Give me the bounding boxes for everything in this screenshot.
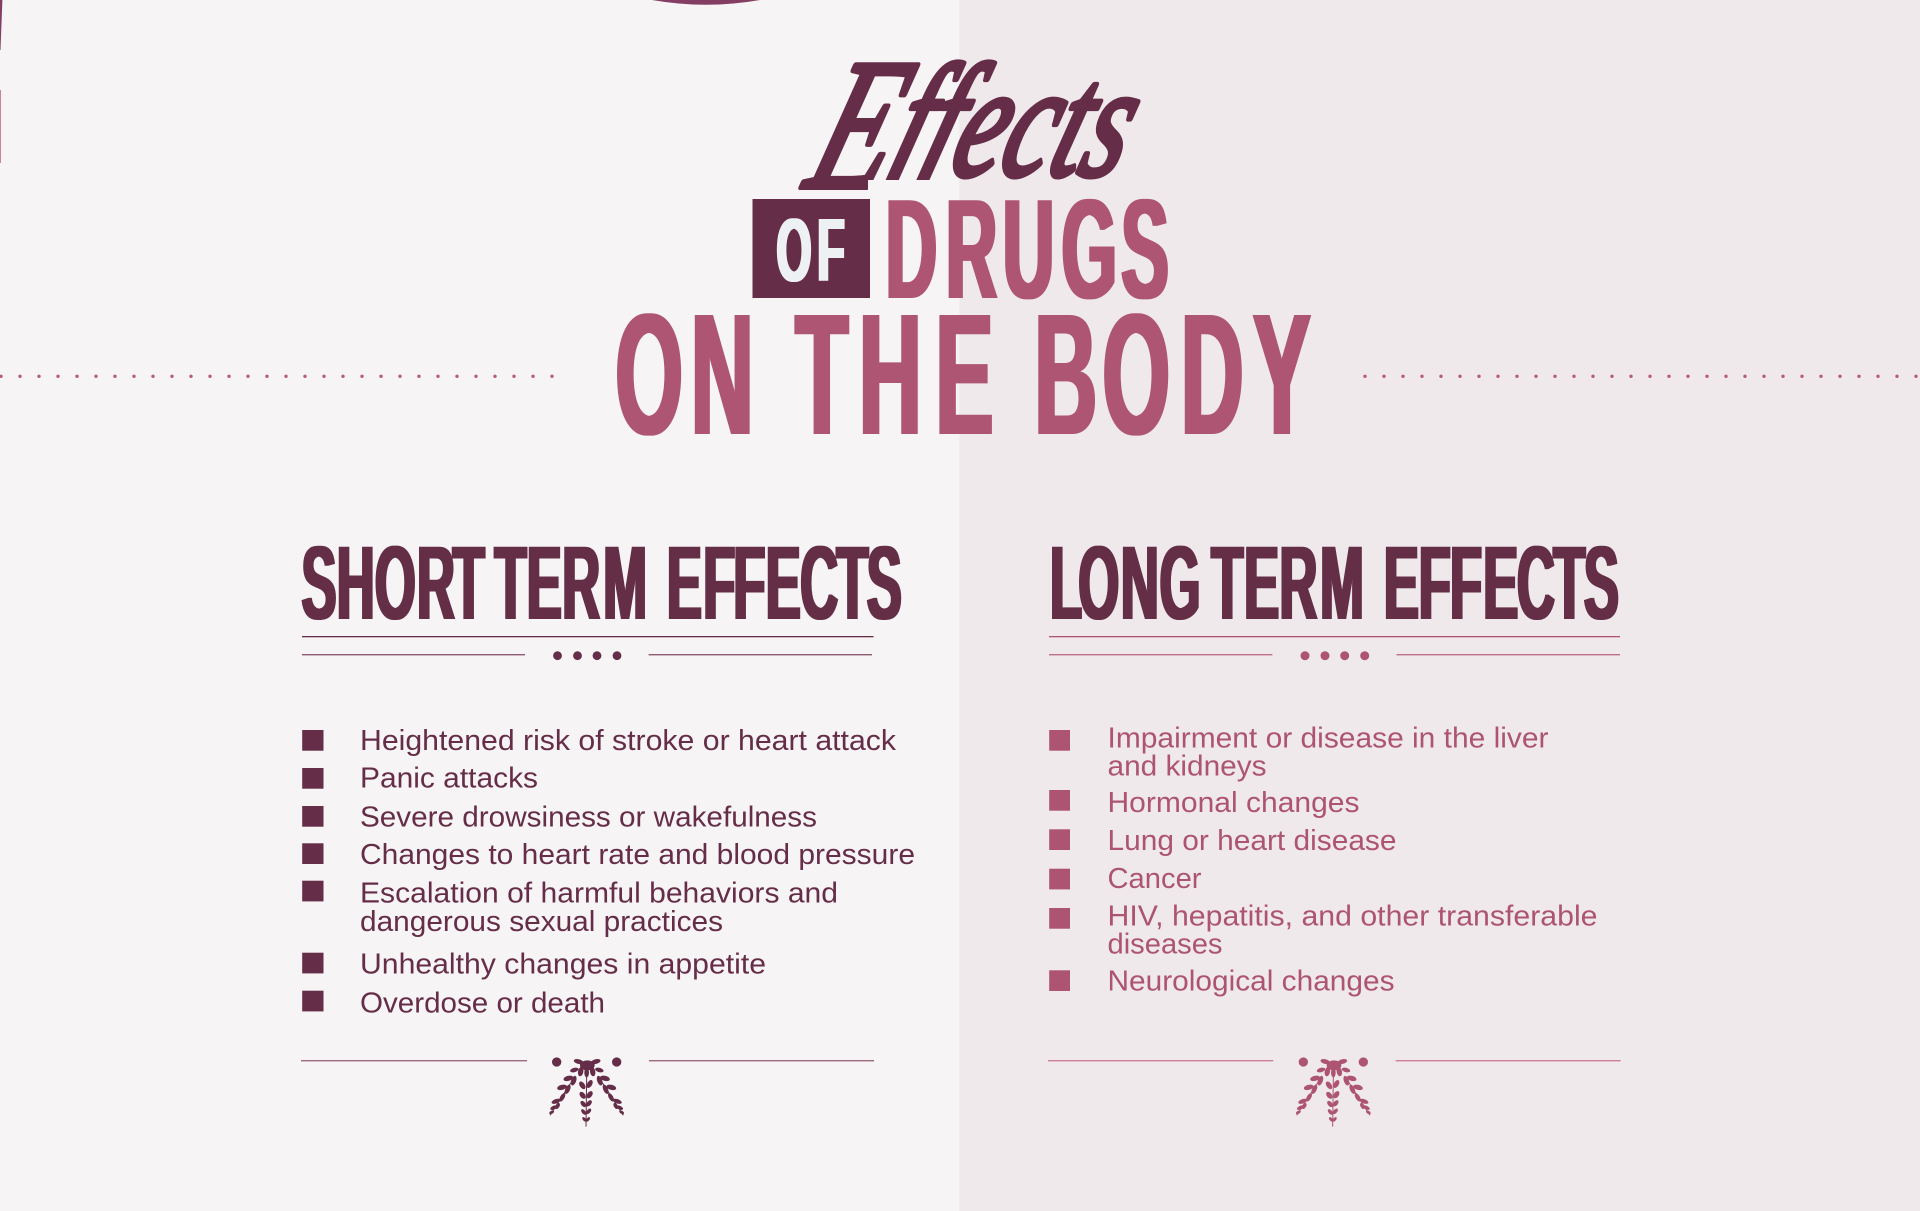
left edge arcs xyxy=(0,0,2,163)
bullet list: long term: Neurological changes xyxy=(1108,966,1394,998)
footer ornament: long term xyxy=(1048,1057,1621,1127)
bullet list: short term: Unhealthy changes in appetite xyxy=(360,948,766,980)
icon: sprig xyxy=(549,1057,625,1127)
heading: long term effects: LONG TERM EFFECTS xyxy=(1050,524,1619,642)
title: OF box xyxy=(752,199,870,301)
footer ornament: short term xyxy=(301,1057,874,1127)
bullet list: long term: Impairment or disease in the liver xyxy=(1108,723,1549,755)
title: DRUGS: DRUGS xyxy=(886,169,1169,328)
title: Effects script: E xyxy=(787,22,934,228)
title: Effects script xyxy=(798,59,1140,190)
top edge arc xyxy=(652,0,760,5)
bullet list: short term xyxy=(302,725,915,1019)
bullet list: long term xyxy=(1049,723,1598,998)
bullet list: long term: and kidneys xyxy=(1108,751,1266,783)
bullet list: long term: Hormonal changes xyxy=(1108,787,1360,819)
title: Effects script: ffects xyxy=(873,33,1164,210)
bullet list: long term: Cancer xyxy=(1108,863,1202,895)
heading rule with dots xyxy=(1049,636,1620,660)
bullet list: long term: diseases xyxy=(1108,929,1222,961)
bullet list: short term: Severe drowsiness or wakefulness xyxy=(360,802,817,834)
panel: long term effects xyxy=(1048,524,1621,1127)
bullet list: long term: Lung or heart disease xyxy=(1108,825,1396,857)
bullet list: short term: Heightened risk of stroke or heart attack xyxy=(360,725,897,757)
bullet list: short term: Panic attacks xyxy=(360,763,538,795)
bullet list: short term: Overdose or death xyxy=(360,987,605,1019)
heading: short term effects: SHORT TERM EFFECTS xyxy=(302,524,902,642)
title xyxy=(617,59,1312,436)
bullet list: short term: Escalation of harmful behaviors and xyxy=(360,878,838,910)
bullet list: long term: HIV, hepatitis, and other transferable xyxy=(1108,901,1598,933)
bullet list: short term: dangerous sexual practices xyxy=(360,906,723,938)
icon: sprig xyxy=(1295,1057,1371,1127)
title: OF box: OF xyxy=(776,201,845,301)
bullet list: short term: Changes to heart rate and blood pressure xyxy=(360,839,915,871)
panel: short term effects xyxy=(301,524,915,1127)
title: ON THE BODY: ON THE BODY xyxy=(616,277,1311,471)
heading rule with dots xyxy=(302,636,874,660)
